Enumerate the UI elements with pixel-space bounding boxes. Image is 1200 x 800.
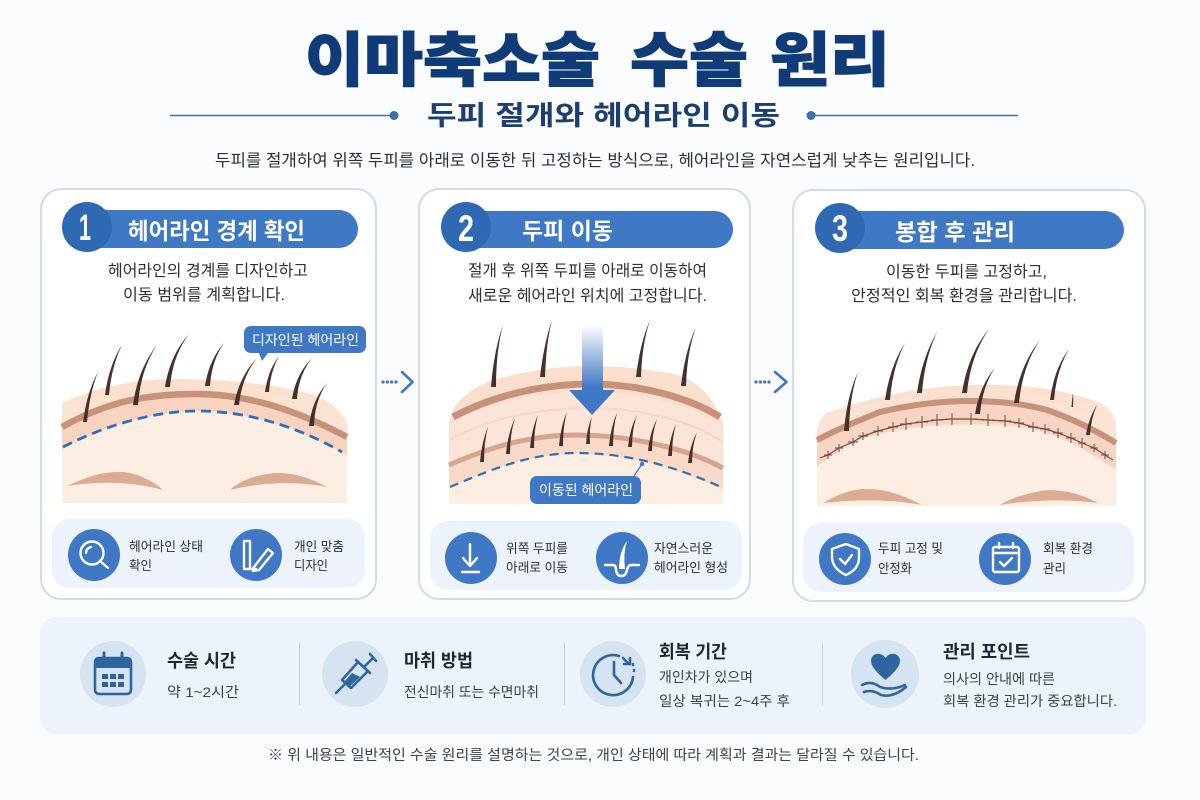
callout: moved hairline [530,462,644,504]
step 2 header [441,202,733,252]
step 1 description: 헤어라인의 경계를 디자인하고 [108,262,308,280]
icon: calendar check [979,533,1031,585]
step 1 header [62,202,358,252]
item: care point: 의사의 안내에 따른 [943,671,1055,687]
callout: moved hairline: 이동된 헤어라인 [539,482,633,498]
step 2 feature strip: 아래로 이동 [506,560,568,575]
step 3 feature strip: 안정화 [878,561,912,576]
intro text: 두피를 절개하여 위쪽 두피를 아래로 이동한 뒤 고정하는 방식으로, 헤어라인을 자연스럽게 낮추는 원리입니다. [215,151,975,170]
item: anesthesia [322,641,539,707]
item: care point [851,640,1117,709]
callout: designed hairline: 디자인된 헤어라인 [252,332,359,348]
step 1 header: 1 [79,207,91,248]
item: recovery period [580,641,790,709]
step 1 feature strip [52,519,365,588]
panel: step 1 [41,189,376,599]
panel: summary bar [40,617,1146,734]
step 2 description: 절개 후 위쪽 두피를 아래로 이동하여 [468,262,707,280]
icon: calendar [80,641,146,707]
step 1 feature strip: 헤어라인 상태 [129,539,203,554]
icon: ruler and pencil [230,529,282,581]
illustration: designed hairline [62,334,347,503]
icon: down arrow [445,532,497,584]
item: surgery time: 수술 시간 [167,651,236,671]
title: 이마축소술 [305,28,600,94]
step 3 description: 안정적인 회복 환경을 관리합니다. [851,287,1077,305]
illustration: moved scalp [449,320,723,504]
item: anesthesia: 전신마취 또는 수면마취 [404,684,539,700]
step 3 feature strip: 두피 고정 및 [878,541,943,556]
subtitle with side rules: 두피 절개와 헤어라인 이동 [427,101,780,131]
step 2 feature strip [430,521,742,590]
title [305,28,890,94]
step 3 feature strip: 관리 [1043,561,1066,576]
step 1 header: 헤어라인 경계 확인 [128,218,305,244]
item: recovery period: 회복 기간 [659,642,727,662]
item: surgery time: 약 1~2시간 [167,684,239,700]
callout: designed hairline [244,326,366,361]
item: surgery time [80,641,239,707]
arrow: step 2 to 3 [756,372,786,392]
step 2 description [468,262,707,305]
icon: hair follicle [596,532,648,584]
subtitle with side rules [170,101,1018,131]
item: recovery period: 개인차가 있으며 [659,669,753,685]
arrow: step 1 to 2 [383,372,412,392]
footnote: ※ 위 내용은 일반적인 수술 원리를 설명하는 것으로, 개인 상태에 따라 계획과 결과는 달라질 수 있습니다. [268,747,919,764]
panel: step 2 [419,189,750,599]
step 3 description [851,263,1077,305]
item: recovery period: 일상 복귀는 2~4주 후 [659,693,790,709]
icon: clock [580,641,646,707]
step 3 description: 이동한 두피를 고정하고, [886,263,1047,281]
step 2 header: 2 [458,208,474,249]
panel: step 3 [793,190,1145,601]
icon: magnifier [68,529,120,581]
icon: shield check [819,533,871,585]
step 1 description: 이동 범위를 계획합니다. [123,286,285,304]
step 2 feature strip: 위쪽 두피를 [506,541,568,556]
icon: syringe [322,641,388,707]
step 2 header: 두피 이동 [522,218,613,244]
step 3 header: 봉합 후 관리 [895,219,1015,245]
icon: heart on hand [851,640,919,708]
step 3 feature strip: 회복 환경 [1043,541,1093,556]
title: 원리 [770,28,890,94]
step 1 description [108,262,308,304]
step 3 feature strip [803,523,1134,592]
step 2 feature strip: 헤어라인 형성 [654,560,728,575]
arrow: scalp moves downward [569,325,615,415]
item: care point: 관리 포인트 [943,642,1030,662]
step 1 feature strip: 개인 맞춤 [294,539,344,554]
title: 수술 [630,28,748,94]
step 3 header: 3 [832,208,848,249]
step 2 description: 새로운 헤어라인 위치에 고정합니다. [468,287,707,305]
step 1 feature strip: 디자인 [294,558,328,573]
step 2 feature strip: 자연스러운 [654,541,713,556]
step 1 feature strip: 확인 [129,558,152,573]
item: care point: 회복 환경 관리가 중요합니다. [943,693,1117,709]
illustration: sutured hairline [817,329,1116,506]
step 3 header [815,203,1124,253]
item: anesthesia: 마취 방법 [404,651,473,671]
